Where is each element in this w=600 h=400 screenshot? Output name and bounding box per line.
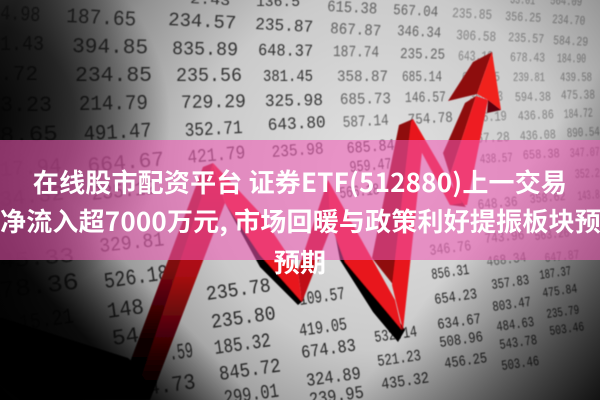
ticker numbers: 187.37 [538,264,572,283]
ticker numbers: 754.78 [407,110,453,129]
arrowhead underside [487,100,501,113]
ticker numbers: 643.18 [458,49,493,66]
ticker numbers: 867.87 [330,20,382,41]
ticker numbers: 594.38 [515,89,551,105]
ticker numbers: 743.96 [484,228,525,248]
ticker numbers: 526.18 [102,261,170,295]
ticker numbers: 567.28 [469,130,510,148]
ticker numbers: .72 [0,64,38,87]
ticker numbers: 54 [110,323,141,352]
ticker numbers: 587.14 [342,112,389,132]
ticker numbers: 678.43 [510,50,545,66]
ticker numbers: 421.79 [187,142,246,169]
ticker numbers: 235.25 [400,46,445,64]
ticker numbers: .59 [167,339,195,367]
ticker numbers: 4.98 [0,3,41,28]
ticker numbers: 45.33 [0,246,75,275]
ticker numbers: 543.78 [498,333,538,354]
ticker numbers: 685.14 [402,69,442,86]
ticker numbers: 1.43 [0,34,44,57]
headline line 1: 在线股市配资平台 证券ETF(512880)上一交易 [33,163,567,200]
ticker numbers: 146.57 [405,89,446,107]
ticker numbers: 357.83 [490,273,530,294]
ticker numbers: 647.87 [544,247,580,266]
ticker numbers: 419.05 [298,315,348,342]
ticker numbers: 648.37 [258,42,313,62]
first fall [213,163,302,302]
ticker numbers: 584.29 [553,33,589,50]
ticker numbers: 358.43 [470,89,503,106]
ticker numbers: 803.47 [491,295,532,316]
third fall [413,119,462,205]
first rise, lit face [142,163,225,392]
ticker numbers: 468.34 [486,250,527,271]
ticker numbers: 325.98 [265,92,323,112]
ticker numbers: 356.25 [505,9,542,26]
ticker numbers: 235.78 [205,275,272,307]
first rise, shaded side [130,163,213,392]
ticker numbers: 394.85 [72,36,148,60]
ticker numbers: 239.81 [513,70,545,85]
ticker numbers: 381.45 [263,68,313,87]
ticker numbers: 235.57 [508,30,545,47]
ticker numbers: 234.85 [75,65,152,88]
ticker numbers: 187.65 [66,6,137,33]
third rise, lit face [392,119,422,330]
ticker numbers: 235.85 [452,6,493,24]
ticker numbers: 346.34 [397,23,442,42]
ticker numbers: 306.58 [456,28,497,46]
ticker numbers: 329.81 [98,229,165,259]
second fall [328,180,402,330]
ticker numbers: 674.83 [300,336,357,364]
ticker numbers: 235.56 [176,65,242,87]
ticker numbers: 959.47 [349,155,392,177]
ticker numbers: 685.73 [340,90,391,109]
headline band [0,140,600,260]
ticker numbers: 729.29 [181,91,246,114]
ticker numbers: 234.57 [168,9,237,35]
ticker numbers: 436.08 [519,127,556,144]
ticker numbers: 664.67 [87,149,165,179]
ticker numbers: 324.89 [305,364,362,392]
third rise, shaded side [372,119,420,287]
ticker numbers: 563.26 [534,225,570,244]
rising red arrow [0,52,501,400]
ticker numbers: 109.57 [298,285,346,311]
ticker numbers: 484.63 [495,315,535,336]
ticker numbers: 503.46 [548,319,585,339]
ticker numbers: 17.94 [0,156,62,183]
shadow under second fall [332,218,405,342]
ticker numbers: 436.86 [517,107,554,124]
ticker numbers: 34.32 [0,183,65,213]
ticker numbers: 654.23 [433,286,478,309]
ticker numbers: 508.96 [438,329,484,352]
ticker numbers: 685.84 [346,137,395,158]
ticker numbers: 503.46 [500,354,540,375]
second rise [298,180,340,302]
final rise, lit face [450,96,488,205]
third fall, shaded underside [422,152,466,207]
ticker numbers: 234.70 [552,12,586,29]
ticker numbers: 435.32 [380,369,430,394]
ticker numbers: 146.19 [469,109,507,127]
ticker numbers: 3.23 [0,93,52,118]
ticker numbers: 845.72 [218,356,282,387]
ticker numbers: 438.57 [479,150,513,167]
ticker numbers: 566.18 [339,181,380,203]
ticker numbers: 235.87 [255,16,314,38]
arrowhead shaded facet [448,52,492,101]
ticker numbers: 235.79 [545,303,580,322]
ticker numbers: 567.04 [393,2,439,21]
arrowhead lit facet [477,52,501,110]
ticker numbers: 643.80 [267,114,326,136]
ticker numbers: 346.76 [429,238,472,260]
arrow cast shadow [0,317,157,400]
ticker numbers: 235.80 [210,303,277,335]
ticker numbers: 148 [105,295,146,325]
ticker numbers: 235.98 [271,140,324,163]
final rise, shaded side [443,96,476,175]
ticker numbers: 456.25 [443,350,488,373]
ticker numbers: 235.12 [90,177,157,207]
ticker numbers: 352.71 [184,117,243,142]
ticker numbers: 214.79 [79,93,148,117]
shadow under first fall [225,203,304,305]
ticker numbers: 358.62 [529,189,566,207]
ticker numbers: 8.65 [0,122,58,149]
headline line 3: 预期 [274,243,326,280]
ticker numbers: 358.87 [337,68,388,86]
ticker numbers: 835.89 [172,38,238,61]
ticker numbers: 856.31 [430,262,470,284]
ticker numbers: 532.14 [373,323,418,347]
ticker numbers: 15.21 [17,305,75,337]
ticker numbers: 187.74 [333,43,379,62]
ticker numbers: 658.38 [522,146,560,163]
ticker numbers: 185.32 [213,330,272,361]
ticker numbers: 491.47 [83,120,152,147]
ticker numbers: 634.67 [436,311,482,334]
ticker numbers: 648.36 [477,195,518,214]
ticker numbers: 475.84 [541,281,578,301]
headline line 2: 净流入超7000万元, 市场回暖与政策利好提振板块预 [0,202,600,239]
ticker numbers: 521.23 [376,347,422,371]
ticker numbers: 681.45 [462,70,500,86]
